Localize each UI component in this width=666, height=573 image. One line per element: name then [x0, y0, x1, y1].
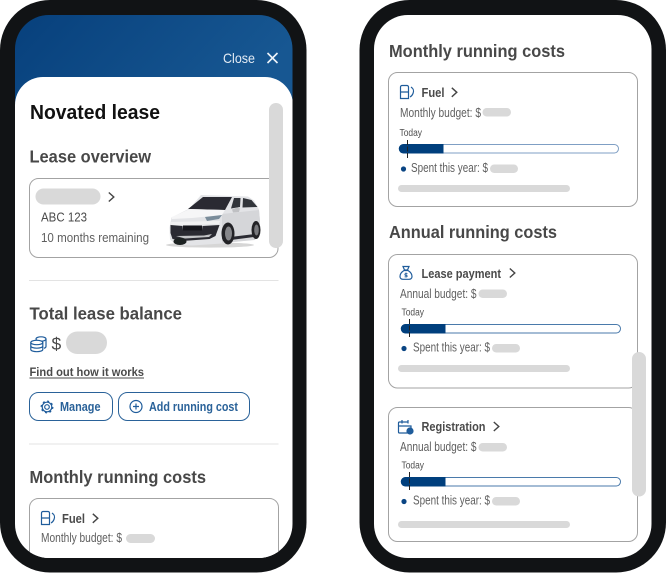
close button	[223, 50, 278, 66]
phone: novated lease overview	[0, 0, 306, 573]
chevron	[510, 268, 515, 278]
icon: fuel pump	[400, 86, 414, 98]
heading: lease overview: Lease overview	[30, 146, 151, 166]
balance row	[31, 332, 107, 354]
add running cost label: Add running cost	[149, 400, 239, 414]
card: fuel	[388, 72, 638, 206]
link: find out how it works: Find out how it works	[30, 367, 144, 379]
button: manage	[30, 392, 112, 420]
registration: ABC 123	[41, 210, 87, 224]
phone frame left	[0, 0, 306, 572]
today label: Today	[400, 128, 422, 139]
fuel label: Fuel	[62, 512, 85, 526]
progress bar	[401, 319, 620, 338]
spent dot	[401, 346, 407, 351]
card: lease payment	[388, 254, 638, 388]
hidden vehicle name	[36, 188, 100, 204]
spent this year: Spent this year: $	[413, 494, 490, 508]
spent this year: Spent this year: $	[411, 161, 488, 175]
icon: calendar clock	[398, 420, 413, 434]
hidden note	[398, 521, 570, 528]
heading: total lease balance: Total lease balance	[30, 304, 182, 324]
lease overview card	[30, 178, 278, 258]
manage label: Manage	[60, 400, 101, 414]
hidden amount	[492, 497, 520, 506]
chevron	[494, 422, 499, 431]
fuel label: Fuel	[422, 86, 444, 100]
white sheet	[15, 77, 293, 573]
title: Novated lease	[30, 101, 160, 124]
hidden amount	[478, 290, 507, 298]
chevron	[452, 88, 457, 97]
annual budget: Annual budget: $	[400, 287, 477, 301]
dollar sign: $	[52, 334, 62, 354]
blue header	[15, 15, 293, 105]
today label: Today	[402, 308, 424, 318]
spent dot	[401, 499, 407, 504]
registration label: Registration	[422, 420, 486, 434]
button: add running cost	[118, 392, 250, 420]
progress bar	[399, 140, 618, 158]
hidden balance	[66, 332, 107, 354]
heading: monthly running costs: Monthly running costs	[389, 41, 565, 61]
screen right	[374, 15, 652, 558]
chevron	[109, 192, 114, 202]
fuel card, cropped	[29, 498, 279, 558]
icon: fuel pump	[42, 512, 55, 524]
spent this year: Spent this year: $	[413, 340, 490, 354]
card: registration	[388, 408, 638, 542]
annual budget: Annual budget: $	[400, 440, 477, 454]
divider	[29, 280, 278, 281]
hidden amount	[482, 108, 511, 116]
heading: monthly running costs: Monthly running costs	[30, 467, 206, 487]
lease payment label: Lease payment	[422, 267, 502, 281]
close button: Close	[223, 50, 255, 66]
hidden amount	[490, 164, 518, 173]
today label: Today	[402, 460, 424, 472]
divider	[29, 444, 278, 445]
icon: plus circle	[130, 400, 142, 412]
icon: gear	[41, 401, 53, 413]
icon: money bag	[400, 266, 412, 279]
monthly budget: Monthly budget: $	[400, 106, 481, 120]
spent dot	[401, 166, 406, 172]
chevron	[93, 514, 98, 523]
progress bar	[401, 472, 620, 491]
hidden note	[398, 185, 570, 192]
phone frame right	[360, 0, 666, 572]
screen left	[15, 15, 293, 573]
monthly budget: Monthly budget: $	[41, 531, 122, 545]
hidden amount	[492, 344, 520, 352]
scrollbar right	[632, 352, 646, 496]
icon: coins	[31, 337, 46, 352]
hidden amount	[126, 534, 155, 543]
hidden amount	[478, 443, 507, 452]
heading: annual running costs: Annual running costs	[389, 222, 557, 242]
months remaining: 10 months remaining	[41, 231, 149, 245]
car image	[166, 195, 260, 248]
scrollbar left	[269, 103, 283, 248]
hidden note	[398, 365, 570, 372]
phone: running costs detail	[360, 0, 666, 572]
